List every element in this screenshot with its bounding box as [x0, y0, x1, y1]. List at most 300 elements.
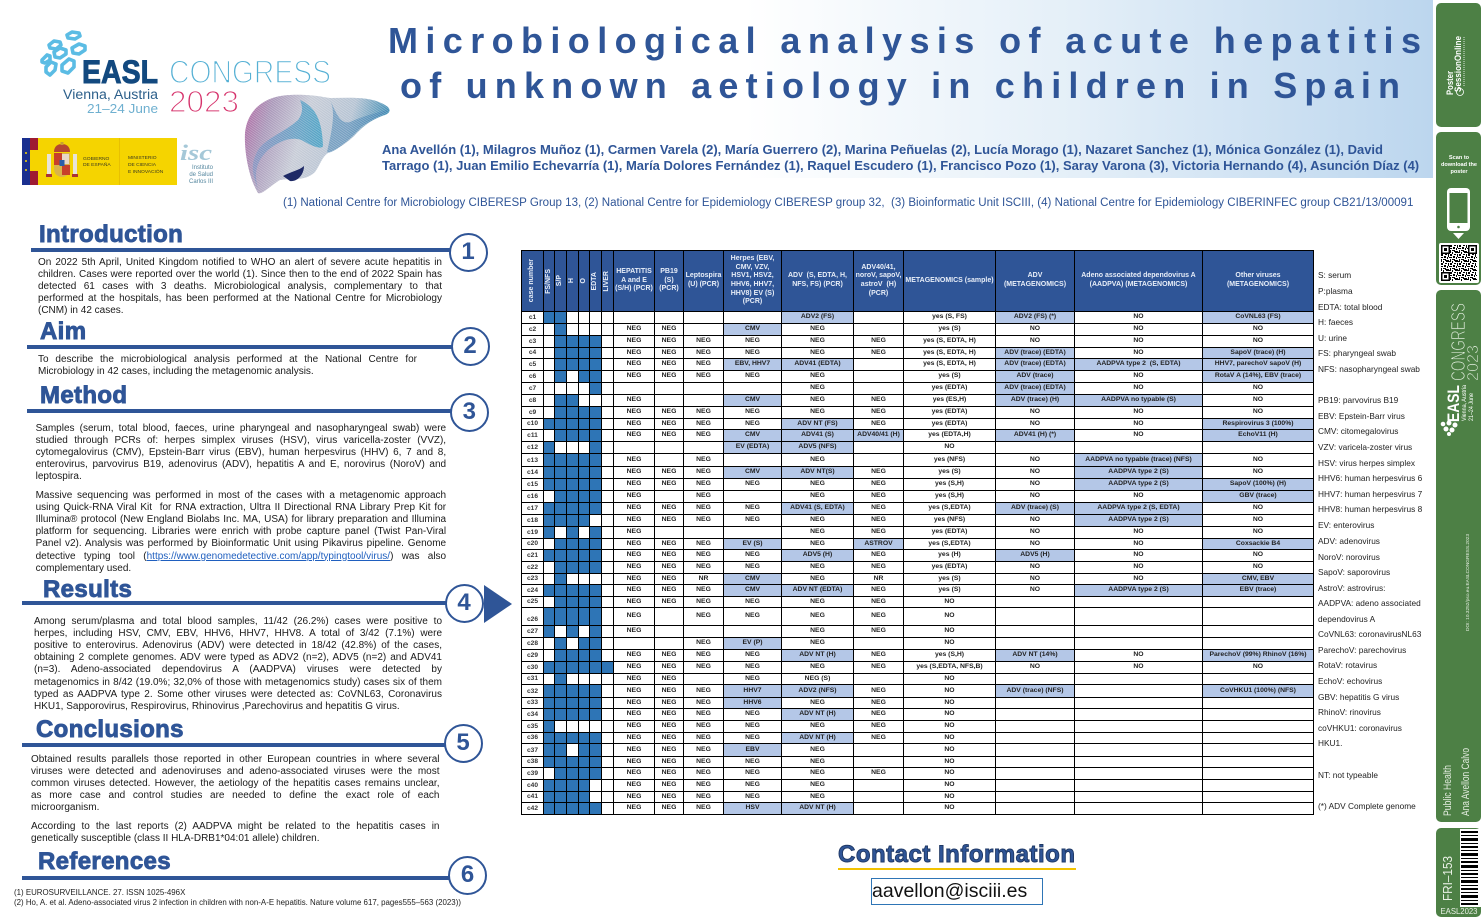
logo: Instituto de Salud Carlos III: Instituto [192, 165, 214, 171]
table body: cases c1 to c42: yes (EDTA) [932, 563, 967, 570]
legend: abbreviations: HHV8: human herpesvirus 8 [1318, 504, 1422, 514]
table body: cases c1 to c42: c34 [527, 711, 538, 718]
table body: cases c1 to c42: NEG [745, 337, 760, 344]
title [388, 20, 1428, 106]
table body: cases c1 to c42: NO [1133, 431, 1144, 438]
table body: cases c1 to c42: yes (S) [938, 575, 961, 582]
panel: EASL congress details: Vienna, Austria [1462, 384, 1468, 421]
table body: cases c1 to c42: EV (P) [742, 639, 762, 646]
table header row: HSV1, HSV2, [731, 272, 774, 279]
table body: cases c1 to c42: NO [1030, 492, 1040, 499]
table header row: ADV40/41, [861, 264, 896, 271]
table body: cases c1 to c42: AADPVA type 2 (S) [1108, 468, 1169, 475]
table body: cases c1 to c42: c26 [527, 616, 538, 623]
table body: cases c1 to c42: NEG [871, 420, 886, 427]
table body: cases c1 to c42: EchoV11 (H) [1238, 431, 1278, 438]
title: Microbiological analysis of acute hepatitis [388, 20, 1428, 61]
table body: cases c1 to c42: yes (S,EDTA) [928, 504, 971, 511]
table body: cases c1 to c42: CoVHKU1 (100%) (NFS) [1220, 687, 1296, 694]
table body: cases c1 to c42: NEG [871, 349, 886, 356]
table body: cases c1 to c42: NO [944, 804, 955, 811]
legend: abbreviations: NFS: nasopharyngeal swab [1318, 364, 1420, 374]
table body: cases c1 to c42: ADV (trace) (NFS) [1006, 687, 1064, 694]
legend: abbreviations: HHV7: human herpesvirus 7 [1318, 489, 1422, 499]
table body: cases c1 to c42: NEG [627, 586, 641, 593]
table body: cases c1 to c42: NEG [662, 360, 676, 367]
table body: cases c1 to c42: ADV41 (H) (*) [1014, 431, 1056, 438]
table body: cases c1 to c42: NO [1133, 408, 1144, 415]
table body: cases c1 to c42: NEG [627, 349, 641, 356]
legend: abbreviations: P:plasma [1318, 286, 1353, 296]
text: introduction [38, 257, 442, 316]
table body: cases c1 to c42: NEG [810, 781, 825, 788]
table body: cases c1 to c42: NEG [871, 710, 886, 717]
legend: abbreviations: NT: not typeable [1318, 770, 1378, 780]
legend: abbreviations: coVHKU1: coronavirus [1318, 723, 1402, 733]
table body: cases c1 to c42: SapoV (100%) (H) [1230, 480, 1286, 487]
table body: cases c1 to c42: NEG [627, 675, 641, 682]
table body: cases c1 to c42: NO [1030, 420, 1040, 427]
heading: Contact Information: Contact Information [838, 841, 1076, 868]
table body: cases c1 to c42: NO [1133, 575, 1144, 582]
table header row: LIVER [603, 271, 610, 291]
table body: cases c1 to c42: NEG [810, 598, 825, 605]
table body: cases c1 to c42: AADPVA type 2 (S) [1108, 516, 1169, 523]
table body: cases c1 to c42: ADV41 (S) [801, 431, 834, 438]
logo: EASL Congress 2023: Vienna, Austria [63, 87, 159, 102]
table body: cases c1 to c42: NEG [662, 687, 676, 694]
table body: cases c1 to c42: ADV (trace) (H) [1011, 396, 1059, 403]
table body: cases c1 to c42: NEG [810, 746, 825, 753]
table body: cases c1 to c42: NEG [627, 492, 641, 499]
table body: cases c1 to c42: NO [1133, 313, 1144, 320]
table body: cases c1 to c42: NEG [745, 793, 760, 800]
icon: QR code [1439, 243, 1479, 283]
table body: cases c1 to c42: NEG [745, 551, 760, 558]
table body: cases c1 to c42: NO [944, 612, 955, 619]
legend: abbreviations: H: faeces [1318, 317, 1353, 327]
text: method paragraph 2 [36, 490, 446, 574]
table body: cases c1 to c42: NEG [871, 468, 886, 475]
table body: cases c1 to c42: yes (S) [938, 586, 961, 593]
table body: cases c1 to c42: NEG [627, 431, 641, 438]
image: liver illustration [244, 94, 390, 194]
heading: Results: Results [43, 576, 132, 603]
table body: cases c1 to c42: NEG [696, 337, 711, 344]
table body: cases c1 to c42: Coxsackie B4 [1236, 540, 1280, 547]
table body: cases c1 to c42: yes (S) [938, 372, 961, 379]
table body: cases c1 to c42: c3 [529, 338, 536, 345]
table body: cases c1 to c42: yes (S) [938, 325, 961, 332]
table body: cases c1 to c42: NO [1030, 480, 1040, 487]
table body: cases c1 to c42: NO [1253, 516, 1263, 523]
table body: cases c1 to c42: NEG [871, 480, 886, 487]
table header row: Herpes (EBV, [731, 255, 774, 262]
text: conclusions paragraph 2 [31, 821, 440, 844]
table body: cases c1 to c42: NEG [696, 687, 711, 694]
table body: cases c1 to c42: NEG [810, 663, 825, 670]
table body: cases c1 to c42: NO [944, 627, 955, 634]
table body: cases c1 to c42: ADV2 (FS) [801, 313, 834, 320]
table body: cases c1 to c42: NEG [810, 540, 825, 547]
table body: cases c1 to c42: NEG [696, 734, 711, 741]
table body: cases c1 to c42: NEG [696, 793, 711, 800]
table body: cases c1 to c42: NEG [662, 699, 676, 706]
table body: cases c1 to c42: yes (EDTA,H) [928, 431, 971, 438]
table body: cases c1 to c42: NEG [810, 699, 825, 706]
table body: cases c1 to c42: NO [1030, 516, 1040, 523]
table body: cases c1 to c42: NEG [810, 758, 825, 765]
table header row: FS/NFS [545, 269, 552, 293]
table body: cases c1 to c42: NEG [810, 456, 825, 463]
table body: cases c1 to c42: NEG [662, 431, 676, 438]
table body: cases c1 to c42: NEG [745, 758, 760, 765]
table body: cases c1 to c42: NO [1133, 540, 1144, 547]
legend: abbreviations: EV: enterovirus [1318, 520, 1374, 530]
table body: cases c1 to c42: NO [1253, 384, 1263, 391]
panel: EASL congress details: EASL [1444, 385, 1463, 422]
table header row: S/P [556, 275, 563, 287]
table body: cases c1 to c42: NEG [871, 734, 886, 741]
table body: cases c1 to c42: NEG [745, 372, 760, 379]
table body: cases c1 to c42: NEG [662, 575, 676, 582]
table body: cases c1 to c42: yes (H) [938, 551, 961, 558]
table body: cases c1 to c42: NEG [627, 769, 641, 776]
table body: cases c1 to c42: ADV2 (NFS) [798, 687, 837, 694]
heading: Introduction: Introduction [39, 221, 183, 248]
logo: Gobierno de España, Ministerio de Ciencia e Innovación: MINISTERIO [128, 155, 157, 161]
table header row: Other viruses [1235, 272, 1281, 279]
table body: cases c1 to c42: NEG [627, 699, 641, 706]
table body: cases c1 to c42: GBV (trace) [1239, 492, 1277, 499]
icon: phone [1447, 188, 1470, 231]
table body: cases c1 to c42: NO [944, 734, 955, 741]
logo: Gobierno de España, Ministerio de Ciencia e Innovación: GOBIERNO [83, 156, 110, 162]
table body: cases c1 to c42: AADPVA no typable (trace) (NFS) [1085, 456, 1192, 463]
table body: cases c1 to c42: NO [1133, 563, 1144, 570]
table header row: ADV (S, EDTA, H, [788, 272, 847, 279]
table body: cases c1 to c42: NEG [662, 746, 676, 753]
table body: cases c1 to c42: NEG [745, 504, 760, 511]
table body: cases c1 to c42: NEG [627, 804, 641, 811]
legend: abbreviations: HSV: virus herpes simplex [1318, 458, 1415, 468]
table body: cases c1 to c42: EBV, HHV7 [735, 360, 770, 367]
table body: cases c1 to c42: NEG [871, 528, 886, 535]
table body: cases c1 to c42: NO [944, 722, 955, 729]
text: method paragraph 2: Panel v2). Analysis was performed by Bioinformatic Unit using Pikavirus pipeline. Genome [36, 538, 446, 549]
table body: cases c1 to c42: ADV5 (H) [1020, 551, 1050, 558]
table body: cases c1 to c42: NO [1133, 384, 1144, 391]
table body: cases c1 to c42: NEG [627, 337, 641, 344]
text: method paragraph 1 [36, 423, 446, 482]
legend: abbreviations: RotaV: rotavirus [1318, 660, 1377, 670]
table body: cases c1 to c42: NO [1030, 563, 1040, 570]
text: conclusions paragraph 2: According to the last reports (2) AADPVA might be related to the hepatitis cases in [31, 821, 440, 832]
table body: cases c1 to c42: c41 [527, 793, 538, 800]
table body: cases c1 to c42: NEG [810, 516, 825, 523]
table body: cases c1 to c42: CoVNL63 (FS) [1235, 313, 1281, 320]
table body: cases c1 to c42: ADV (trace) (S) [1011, 504, 1059, 511]
text: aim: To describe the microbiological analysis performed at the National Centre for [38, 354, 417, 365]
table body: cases c1 to c42: NEG [810, 372, 825, 379]
table body: cases c1 to c42: ADV NT (H) [799, 804, 836, 811]
table body: cases c1 to c42: ParechoV (99%) RhinoV (16%) [1209, 651, 1307, 658]
table body: cases c1 to c42: NEG [810, 639, 825, 646]
authors: Tarrago (1), Juan Emilio Echevarría (1), María Dolores Fernández (1), Raquel Escudero (1), Francisco Pozo (1), Saray Varona (3), Victoria Hernando (4), Asunción Díaz (4) [382, 158, 1419, 173]
table body: cases c1 to c42: RotaV A (14%), EBV (trace) [1215, 372, 1301, 379]
table body: cases c1 to c42: NEG [627, 504, 641, 511]
table body: cases c1 to c42: NEG [871, 663, 886, 670]
table body: cases c1 to c42: NO [1253, 408, 1263, 415]
table body: cases c1 to c42: NEG [627, 612, 641, 619]
table body: cases c1 to c42: CMV, EBV [1242, 575, 1274, 582]
table body: cases c1 to c42: c17 [527, 505, 538, 512]
table body: cases c1 to c42: Respirovirus 3 (100%) [1222, 420, 1294, 427]
table body: cases c1 to c42: NEG [627, 651, 641, 658]
table header row: (METAGENOMICS) [1004, 281, 1066, 288]
text: method paragraph 2: Illumina® protocol (New England Biolabs Inc. MA, USA) for library preparation and Illumina [36, 514, 446, 525]
table body: cases c1 to c42: NO [944, 781, 955, 788]
table body: cases c1 to c42: NEG [662, 598, 676, 605]
table header row: Adeno associated dependovirus A [1081, 272, 1196, 279]
table body: cases c1 to c42: c31 [527, 675, 538, 682]
table body: cases c1 to c42: EV (EDTA) [736, 443, 769, 450]
table body: cases c1 to c42: NEG [696, 492, 711, 499]
contact email box: aavellon@isciii.es [872, 880, 1027, 902]
text: method paragraph 1: Samples (serum, total blood, faeces, urine pharyngeal and nasopharyngeal swab) were [36, 423, 446, 434]
table body: cases c1 to c42: NO [1133, 337, 1144, 344]
table body: cases c1 to c42: NEG [696, 372, 711, 379]
table body: cases c1 to c42: NEG [662, 551, 676, 558]
logo: EASL Congress 2023: EASL [82, 54, 158, 90]
table body: cases c1 to c42: NEG [696, 540, 711, 547]
table body: cases c1 to c42: CMV [745, 586, 760, 593]
table body: cases c1 to c42: NO [1133, 528, 1144, 535]
table body: cases c1 to c42: NEG [745, 349, 760, 356]
logo: Gobierno de España, Ministerio de Ciencia e Innovación: DE CIENCIA [128, 162, 157, 168]
table body: cases c1 to c42: NO [944, 675, 955, 682]
table body: cases c1 to c42: c35 [527, 723, 538, 730]
text: conclusions paragraph 1: viruses were detected and adenoviruses and adeno-associated viruses were the most [31, 766, 440, 777]
table body: cases c1 to c42: NEG [696, 586, 711, 593]
table body: cases c1 to c42: NEG [627, 598, 641, 605]
table body: cases c1 to c42: NEG [696, 431, 711, 438]
table body: cases c1 to c42: NEG [696, 563, 711, 570]
table body: cases c1 to c42: c15 [527, 481, 538, 488]
table body: cases c1 to c42: NO [1253, 551, 1263, 558]
legend: abbreviations: ParechoV: parechovirus [1318, 645, 1406, 655]
table body: cases c1 to c42: ASTROV [864, 540, 893, 547]
table body: cases c1 to c42: NEG [871, 337, 886, 344]
table body: cases c1 to c42: NEG [662, 758, 676, 765]
table body: cases c1 to c42: NEG [627, 781, 641, 788]
table body: cases c1 to c42: ADV NT (H) [799, 734, 836, 741]
legend: abbreviations: EBV: Epstein-Barr virus [1318, 411, 1405, 421]
table body: cases c1 to c42: NEG [696, 468, 711, 475]
table body: cases c1 to c42: c30 [527, 664, 538, 671]
legend: abbreviations: FS: pharyngeal swab [1318, 348, 1396, 358]
table body: cases c1 to c42: NO [1030, 540, 1040, 547]
number badge 5: 5 [456, 729, 470, 756]
table body: cases c1 to c42: c13 [527, 457, 538, 464]
table body: cases c1 to c42: CMV [745, 396, 760, 403]
table body: cases c1 to c42: NEG [662, 325, 676, 332]
table body: cases c1 to c42: ADV41 (EDTA) [794, 360, 841, 367]
table body: cases c1 to c42: NEG [662, 710, 676, 717]
legend: abbreviations: dependovirus A [1318, 614, 1375, 624]
table body: cases c1 to c42: NO [944, 769, 955, 776]
table body: cases c1 to c42: SapoV (trace) (H) [1230, 349, 1286, 356]
table body: cases c1 to c42: NO [944, 699, 955, 706]
table body: cases c1 to c42: c20 [527, 540, 538, 547]
text: results: HKU1, Sapporovirus, Respirovirus, Rhinovirus ,Parechovirus and hepatitis G virus. [34, 701, 400, 712]
table body: cases c1 to c42: ADV (trace) [1016, 372, 1054, 379]
table body: cases c1 to c42: c5 [529, 361, 536, 368]
table body: cases c1 to c42: c42 [527, 805, 538, 812]
table body: cases c1 to c42: NEG [696, 480, 711, 487]
table body: cases c1 to c42: NEG [662, 504, 676, 511]
table body: cases c1 to c42: NEG [810, 325, 825, 332]
logo: EASL Congress 2023 [40, 30, 331, 119]
table body: cases c1 to c42: NEG [696, 769, 711, 776]
table body: cases c1 to c42: c38 [527, 758, 538, 765]
panel: EASL congress details: DOI: 10.3252/pso.eu.EASLCONGRESS.2023 [1465, 534, 1471, 631]
table body: cases c1 to c42: NEG [745, 598, 760, 605]
text: method paragraph 1: cytomegalovirus (CMV), Epstein-Barr virus (EBV), human herpesvirus (HHV) 6, 7 and 8, [36, 447, 446, 458]
text: references: (1) EUROSURVEILLANCE. 27. ISSN 1025-496X [14, 888, 185, 897]
table body: cases c1 to c42: NEG [696, 360, 711, 367]
table body: cases c1 to c42: NEG [871, 492, 886, 499]
table body: cases c1 to c42: CMV [745, 468, 760, 475]
table body: cases c1 to c42: ADV NT (FS) [797, 420, 838, 427]
table body: cases c1 to c42: NEG [745, 734, 760, 741]
table body: cases c1 to c42: NEG (S) [805, 675, 830, 682]
table body: cases c1 to c42: NEG [662, 337, 676, 344]
table body: cases c1 to c42: yes (NFS) [934, 456, 965, 463]
table body: cases c1 to c42: NEG [662, 769, 676, 776]
table body: cases c1 to c42: NEG [810, 480, 825, 487]
table body: cases c1 to c42: NEG [810, 627, 825, 634]
table header row: (PCR) [743, 298, 762, 305]
table body: cases c1 to c42: c10 [527, 420, 538, 427]
affiliations: (1) National Centre for Microbiology CIBERESP Group 13, (2) National Centre for Epidemiology CIBERESP group 32, (3) Bioinformatic Unit ISCIII, (4) National Centre for Epidemiology CIBERINFEC group CB21/13/00091 [283, 197, 1413, 209]
table body: cases c1 to c42: ADV2 (FS) (*) [1014, 313, 1056, 320]
table body: cases c1 to c42: NEG [627, 396, 641, 403]
table body: cases c1 to c42: CMV [745, 575, 760, 582]
table body: cases c1 to c42: c36 [527, 734, 538, 741]
table: microbiological results per case [521, 250, 1314, 815]
text: conclusions paragraph 1: as more case and control studies are needed to define the exact role of each [31, 790, 440, 801]
legend: abbreviations: ADV: adenovirus [1318, 536, 1380, 546]
table body: cases c1 to c42: yes (S, EDTA, H) [923, 337, 976, 344]
table body: cases c1 to c42: NEG [627, 687, 641, 694]
table body: cases c1 to c42: NEG [810, 337, 825, 344]
table body: cases c1 to c42: c28 [527, 640, 538, 647]
text: results: obtaining 2 complete genomes. ADV were typed as ADV2 (n=2), ADV5 (n=2) and ADV41 [34, 652, 442, 663]
header banner gradient [0, 0, 1433, 178]
table body: cases c1 to c42: NEG [696, 722, 711, 729]
table body: cases c1 to c42: NEG [696, 758, 711, 765]
table body: cases c1 to c42: NEG [627, 734, 641, 741]
table body: cases c1 to c42: c33 [527, 699, 538, 706]
legend: abbreviations: HKU1. [1318, 738, 1342, 748]
table body: cases c1 to c42: NEG [696, 639, 711, 646]
table body: cases c1 to c42: NEG [662, 793, 676, 800]
text: method paragraph 1: studied through PCRs of: herpes simplex viruses (HSV), virus varicella-zoster (VVZ), [36, 435, 446, 446]
table header row: noroV, sapoV, [856, 272, 901, 279]
legend: abbreviations: S: serum [1318, 270, 1351, 280]
table body: cases c1 to c42: NEG [627, 758, 641, 765]
table header row: HHV8) EV (S) [731, 290, 774, 297]
table body: cases c1 to c42: NO [1133, 492, 1144, 499]
table body: cases c1 to c42: NEG [810, 349, 825, 356]
table body: cases c1 to c42: NEG [662, 663, 676, 670]
panel: scan to download [1436, 132, 1481, 285]
table body: cases c1 to c42: NO [1253, 663, 1263, 670]
table body: cases c1 to c42: NEG [745, 563, 760, 570]
legend: abbreviations: AADPVA: adeno associated [1318, 598, 1421, 608]
table body: cases c1 to c42: yes (S,H) [935, 651, 964, 658]
table body: cases c1 to c42: NO [1030, 337, 1040, 344]
table body: cases c1 to c42: NEG [696, 699, 711, 706]
table body: cases c1 to c42: yes (S,EDTA, NFS,B) [916, 663, 983, 670]
table body: cases c1 to c42: yes (EDTA) [932, 528, 967, 535]
legend: abbreviations: EDTA: total blood [1318, 302, 1382, 312]
panel: poster code and barcode: EASL2023 [1440, 906, 1478, 916]
table body: cases c1 to c42: NEG [627, 627, 641, 634]
table body: cases c1 to c42: HHV6 [743, 699, 762, 706]
table body: cases c1 to c42: ADV (trace) (EDTA) [1004, 384, 1066, 391]
table body: cases c1 to c42: NO [1030, 468, 1040, 475]
table body: cases c1 to c42: NO [944, 639, 955, 646]
table body: cases c1 to c42: c6 [529, 373, 536, 380]
sidebar: green poster panels [1436, 3, 1482, 917]
table body: cases c1 to c42: NEG [662, 349, 676, 356]
table body: cases c1 to c42: NO [1030, 575, 1040, 582]
table body: cases c1 to c42: NEG [745, 408, 760, 415]
table body: cases c1 to c42: NO [1030, 325, 1040, 332]
table body: cases c1 to c42: NEG [745, 710, 760, 717]
table body: cases c1 to c42: NO [1030, 408, 1040, 415]
table body: cases c1 to c42: NO [944, 598, 955, 605]
table body: cases c1 to c42: NEG [810, 492, 825, 499]
table body: cases c1 to c42: yes (S,H) [935, 480, 964, 487]
table body: cases c1 to c42: NEG [662, 372, 676, 379]
table body: cases c1 to c42: NEG [627, 360, 641, 367]
table body: cases c1 to c42: NEG [627, 456, 641, 463]
table body: cases c1 to c42: NEG [871, 586, 886, 593]
panel: EASL congress details: Public Health [1442, 765, 1454, 816]
table header row: (S) [664, 277, 674, 284]
table header row: (S/H) (PCR) [615, 285, 653, 292]
table body: cases c1 to c42: c18 [527, 517, 538, 524]
table body: cases c1 to c42: NO [944, 746, 955, 753]
legend: abbreviations: NoroV: norovirus [1318, 552, 1380, 562]
table body: cases c1 to c42: ADV NT (H) [799, 651, 836, 658]
table body: cases c1 to c42: ADV (trace) (EDTA) [1004, 360, 1066, 367]
table body: cases c1 to c42: NEG [745, 722, 760, 729]
text: references: (2) Ho, A. et al. Adeno-associated virus 2 infection in children with non-A-E hepatitis. Nature volume 617, pages555–563 (2023)) [14, 898, 461, 907]
table body: cases c1 to c42: NEG [745, 480, 760, 487]
table body: cases c1 to c42: NEG [871, 687, 886, 694]
text: method paragraph 2: platform for sequencing. Libraries were enrich with probe capture panel (Twist Pan-Viral [36, 526, 446, 537]
panel: PosterSessionOnline: SessionOnline [1453, 36, 1463, 92]
table body: cases c1 to c42: NEG [745, 516, 760, 523]
table header row [522, 251, 1313, 311]
table body: cases c1 to c42: NEG [871, 504, 886, 511]
legend: abbreviations: CMV: citomegalovirus [1318, 426, 1398, 436]
table body: cases c1 to c42: NO [1253, 468, 1263, 475]
